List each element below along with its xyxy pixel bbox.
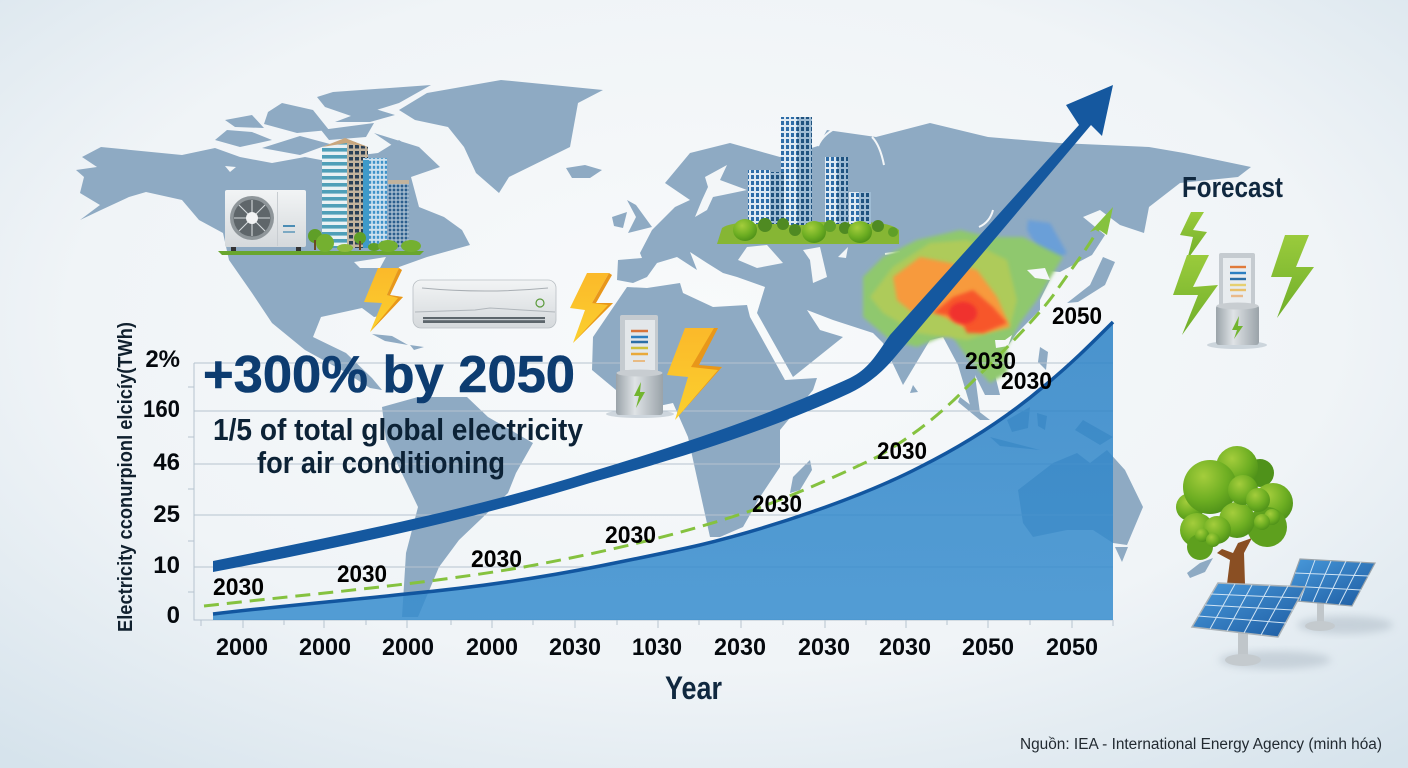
icon: wall air conditioner	[413, 280, 556, 328]
tower left	[322, 138, 368, 248]
y axis values: 2%	[145, 346, 180, 373]
subheading: 1/5 of total global electricity	[213, 412, 584, 447]
x axis title: Year	[665, 670, 722, 706]
island base	[717, 222, 899, 244]
green bolt lower left	[1173, 255, 1218, 335]
data labels on chart: 2030	[471, 546, 522, 573]
crown	[1176, 446, 1293, 560]
heat map over asia	[863, 220, 1067, 383]
icon: lightning bolt 1	[364, 268, 403, 332]
yellow green	[870, 240, 1017, 340]
headline: +300% by 2050	[203, 346, 575, 404]
x axis values	[216, 634, 1098, 661]
x axis values: 2000	[216, 634, 268, 661]
green bolt top left	[1180, 212, 1207, 260]
lake patch	[1027, 220, 1067, 263]
blue area series	[213, 322, 1113, 620]
africa	[592, 283, 817, 537]
icon: lightning bolt 3	[667, 328, 722, 420]
right tower	[825, 157, 848, 224]
chart gridlines and axes	[188, 363, 1113, 628]
icon: outdoor AC unit and buildings	[218, 138, 424, 255]
x axis values: 2030	[798, 634, 850, 661]
source line: Nguồn: IEA - International Energy Agency (minh hóa)	[1020, 736, 1382, 753]
x axis values: 2030	[714, 634, 766, 661]
new zealand	[1187, 558, 1213, 578]
australia	[1018, 450, 1143, 562]
tall tower	[781, 117, 812, 225]
y axis label: Electricity cconurpionl elcicíy(TWh)	[115, 322, 137, 632]
y axis values	[143, 346, 180, 629]
trunk	[1217, 538, 1252, 584]
icon: solar panel front	[1192, 583, 1331, 669]
outdoor AC unit	[225, 190, 306, 251]
tower right	[388, 180, 409, 248]
y axis values: 25	[153, 501, 180, 528]
y axis values: 160	[143, 396, 180, 423]
x axis values: 2000	[466, 634, 518, 661]
big blue growth arrow	[213, 85, 1113, 572]
data labels on chart	[213, 303, 1102, 601]
y axis values: 10	[153, 552, 180, 579]
iceland	[566, 165, 602, 178]
uk and ireland	[612, 200, 652, 233]
icon: tree	[1176, 446, 1293, 584]
shrubs	[308, 229, 421, 252]
red orange	[933, 290, 1007, 333]
green bolt right	[1271, 235, 1314, 318]
x axis values: 2030	[879, 634, 931, 661]
data labels on chart: 2030	[1001, 368, 1052, 395]
forecast battery	[1207, 253, 1267, 349]
data labels on chart: 2030	[605, 522, 656, 549]
left tower	[748, 170, 784, 224]
greenland	[399, 80, 603, 193]
tower middle	[363, 158, 387, 248]
icon: lightning bolt 2	[570, 273, 613, 343]
icon: green bolts and forecast battery	[1173, 212, 1314, 349]
world map	[76, 80, 1251, 617]
subheading: for air conditioning	[257, 445, 505, 480]
red centre	[949, 302, 977, 324]
madagascar	[790, 460, 812, 493]
y axis values: 46	[153, 449, 180, 476]
y axis values: 0	[167, 602, 180, 629]
data labels on chart: 2030	[965, 348, 1016, 375]
coast cut-outs	[995, 268, 1050, 348]
subheading	[213, 412, 584, 480]
caribbean islands	[372, 334, 424, 350]
orange	[893, 257, 1010, 333]
south america	[382, 397, 533, 617]
x axis values: 2050	[962, 634, 1014, 661]
forecast label: Forecast	[1182, 172, 1283, 204]
arctic islands	[215, 85, 440, 167]
green dashed forecast line	[204, 207, 1113, 606]
data labels on chart: 2030	[877, 438, 927, 465]
x axis values: 1030	[632, 634, 682, 661]
data labels on chart: 2030	[752, 491, 802, 518]
arctic russia inlets	[818, 117, 993, 254]
x axis values: 2000	[382, 634, 434, 661]
small tower	[849, 192, 871, 224]
outer green	[863, 230, 1063, 383]
japan and asian islands	[910, 257, 1115, 450]
trees	[733, 218, 898, 243]
data labels on chart: 2050	[1052, 303, 1102, 330]
data labels on chart: 2030	[213, 574, 264, 601]
ground strip	[218, 251, 424, 255]
x axis values: 2000	[299, 634, 351, 661]
icon: battery kiosk	[606, 315, 674, 418]
eurasia	[617, 123, 1251, 420]
inland seas	[225, 165, 848, 283]
north america	[76, 140, 470, 390]
x axis values: 2030	[549, 634, 601, 661]
icon: solar panel back	[1285, 559, 1393, 634]
x axis values: 2050	[1046, 634, 1098, 661]
icon: city buildings on green island	[717, 117, 899, 244]
data labels on chart: 2030	[337, 561, 387, 588]
